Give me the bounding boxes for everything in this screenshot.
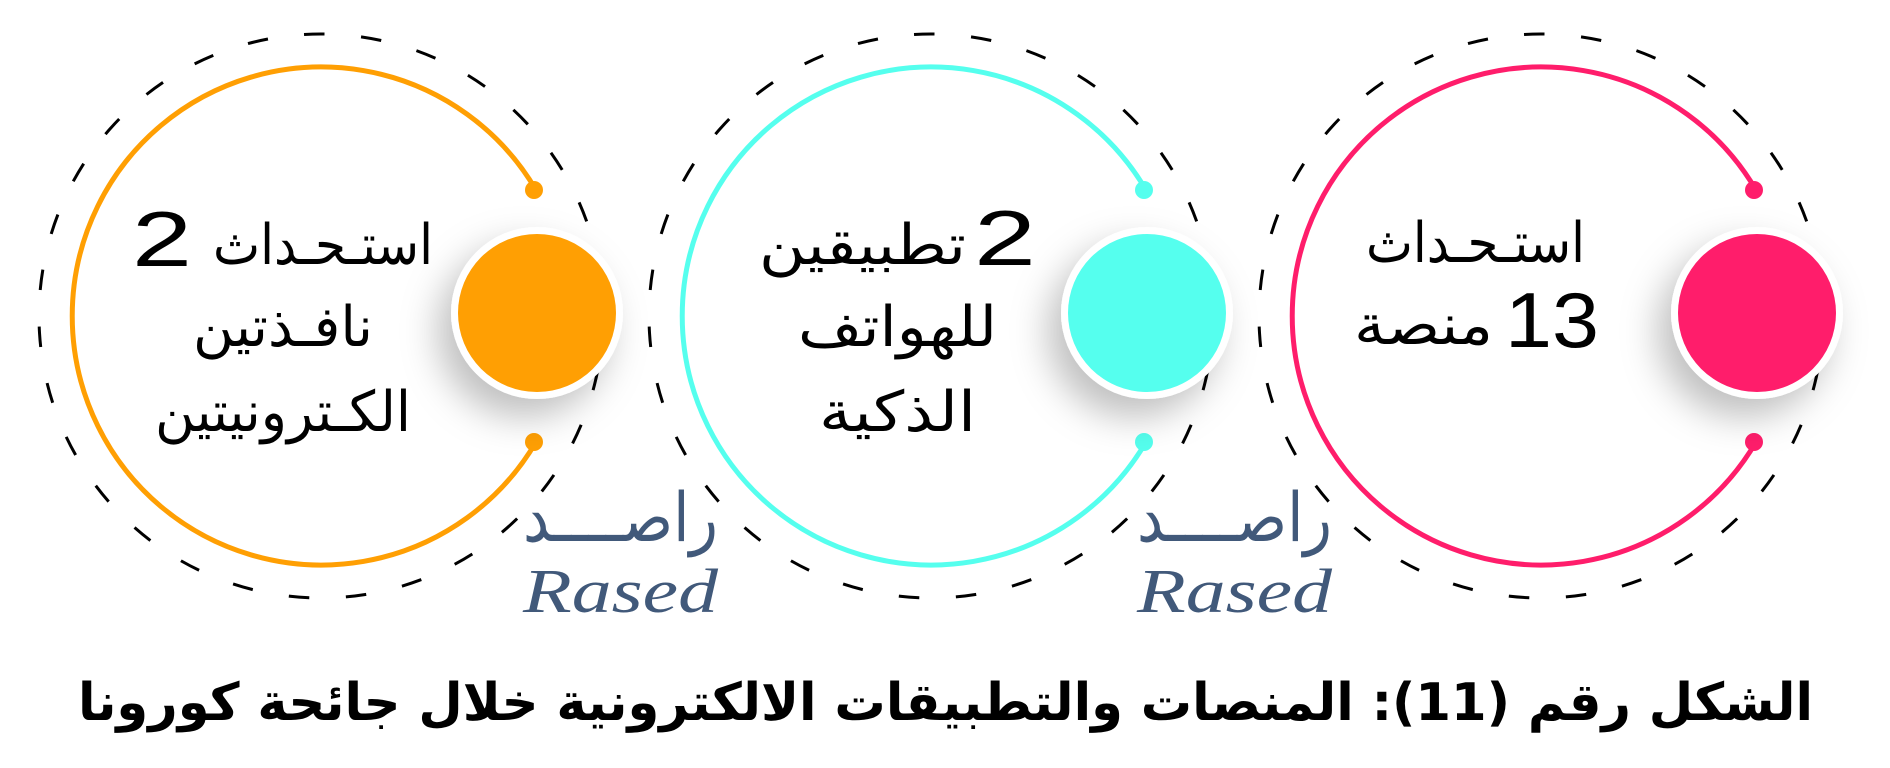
logo: Rased (left) xyxy=(522,479,719,626)
pink label text: استـحـداث xyxy=(1366,211,1585,276)
orange label text: نافـذتين xyxy=(193,295,373,360)
panel: web portals (orange) xyxy=(23,18,623,614)
pink disk xyxy=(1671,227,1843,399)
orange label text: 2 xyxy=(132,195,192,283)
orange dashed ring xyxy=(23,18,619,614)
cyan label text: الذكية xyxy=(819,380,976,445)
pink dashed ring xyxy=(1243,18,1839,614)
orange label text xyxy=(132,195,433,445)
logo: Rased (right): Rased xyxy=(1136,558,1333,626)
cyan dashed ring xyxy=(633,18,1229,614)
orange disk xyxy=(451,227,623,399)
cyan arc with end dots xyxy=(682,67,1153,565)
logo: Rased (right): راصــــد xyxy=(1137,479,1332,558)
logo: Rased (right) xyxy=(1136,479,1333,626)
logo: Rased (left): Rased xyxy=(522,558,719,626)
cyan label text: 2 xyxy=(974,194,1036,282)
pink label text xyxy=(1354,211,1599,364)
cyan disk xyxy=(1061,227,1233,399)
panel: smartphone apps (cyan) xyxy=(633,18,1233,614)
pink label text: 13 xyxy=(1505,276,1599,364)
cyan label text: تطبيقين xyxy=(759,213,966,278)
cyan label text xyxy=(759,194,1036,445)
logo: Rased (left): راصــــد xyxy=(523,479,718,558)
cyan label text: للهواتف xyxy=(798,295,997,360)
orange arc with end dots xyxy=(72,67,543,565)
panel: platforms (pink) xyxy=(1243,18,1843,614)
caption: الشكل رقم (11): المنصات والتطبيقات الالكترونية خلال جائحة كورونا xyxy=(78,673,1813,733)
pink arc with end dots xyxy=(1292,67,1763,565)
pink label text: منصة xyxy=(1354,293,1493,358)
orange label text: استـحـداث xyxy=(213,213,433,278)
orange label text: الكـترونيتين xyxy=(155,380,411,445)
